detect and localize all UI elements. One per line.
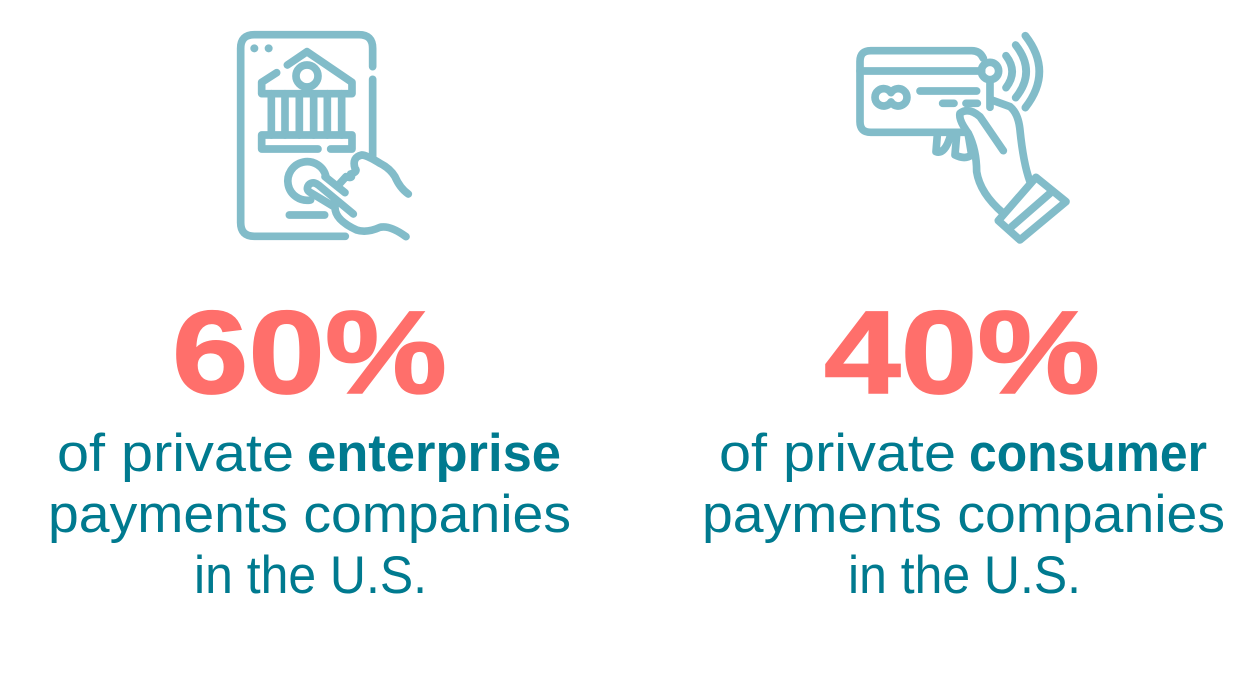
text block: enterprise caption: in the U.S. — [194, 546, 427, 605]
text block: consumer caption: in the U.S. — [848, 546, 1081, 605]
text block: consumer caption: of private — [719, 424, 956, 483]
text block: consumer caption: consumer — [969, 424, 1207, 483]
stat: 40%: 40% — [824, 287, 1100, 419]
text block: consumer caption — [702, 424, 1225, 605]
text block: enterprise caption: of private — [57, 424, 294, 483]
text block: enterprise caption: enterprise — [307, 424, 561, 483]
text block: consumer caption: payments companies — [702, 485, 1225, 544]
stat: 60%: 60% — [172, 287, 447, 419]
icon: hand holding contactless card — [860, 36, 1066, 240]
text block: enterprise caption — [48, 424, 571, 605]
icon: phone with bank and tapping hand — [241, 35, 408, 237]
text block: enterprise caption: payments companies — [48, 485, 571, 544]
